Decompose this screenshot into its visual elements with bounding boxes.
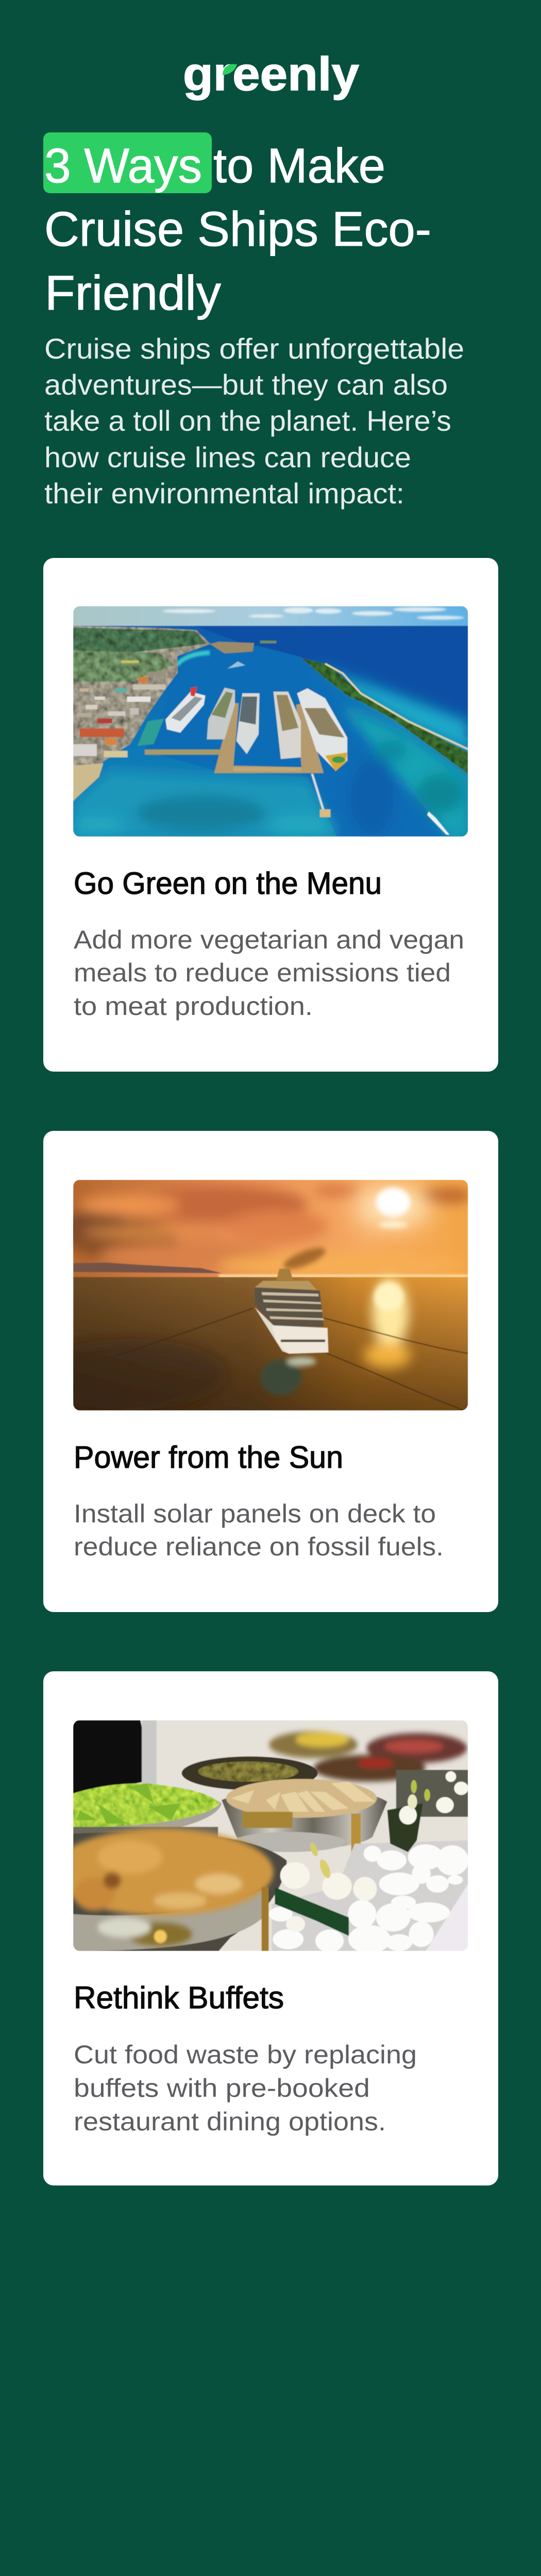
intro paragraph: their environmental impact: [44,477,404,510]
card body: restaurant dining options. [74,2107,386,2136]
logo: greenly: greenly [183,48,359,100]
flowers front [275,1887,349,1936]
lettuce bowl [105,1801,222,1827]
card title: Rethink Buffets [74,1980,284,2015]
card body: Install solar panels on deck to [74,1499,436,1528]
card body: reduce reliance on fossil fuels. [74,1532,444,1561]
card body: buffets with pre-booked [74,2074,370,2103]
card body: to meat production. [74,992,313,1021]
photo: buffet chafing dishes [52,1720,468,1953]
card title: Power from the Sun [74,1440,343,1475]
rolls bowl [222,1796,387,1847]
card body [74,1499,444,1561]
card body: Cut food waste by replacing [74,2040,417,2069]
icon: leaf on the r [223,64,237,75]
card body: Add more vegetarian and vegan [74,925,464,954]
title: to Make [213,139,385,193]
horizon band [218,1275,470,1280]
title: Cruise Ships Eco- [44,202,431,257]
panel: Go Green on the Menu [43,558,498,1072]
white stones [272,1840,468,1951]
land [73,626,210,802]
ships [165,687,449,835]
card body [74,2040,417,2136]
piers [214,703,324,773]
island [301,658,468,774]
panel: Power from the Sun [32,1131,498,1612]
title highlight: 3 Ways: 3 Ways [44,139,202,193]
ship [255,1268,328,1354]
photo: aerial of cruise ships docked at a port [71,606,468,838]
title: Friendly [45,266,221,320]
card body [74,925,464,1021]
intro paragraph: how cruise lines can reduce [44,441,411,473]
wake lines [138,1308,468,1411]
title [43,132,431,320]
intro paragraph: adventures—but they can also [44,368,448,401]
card title: Go Green on the Menu [74,866,382,901]
intro paragraph: Cruise ships offer unforgettable [44,332,464,365]
photo: cruise ship at sunset [73,1180,468,1411]
card body: meals to reduce emissions tied [74,958,451,987]
intro paragraph [44,332,464,510]
intro paragraph: take a toll on the planet. Here’s [44,404,451,437]
panel: Rethink Buffets [43,1671,498,2185]
flowers right [387,1803,422,1852]
front bowl [73,1832,286,1951]
